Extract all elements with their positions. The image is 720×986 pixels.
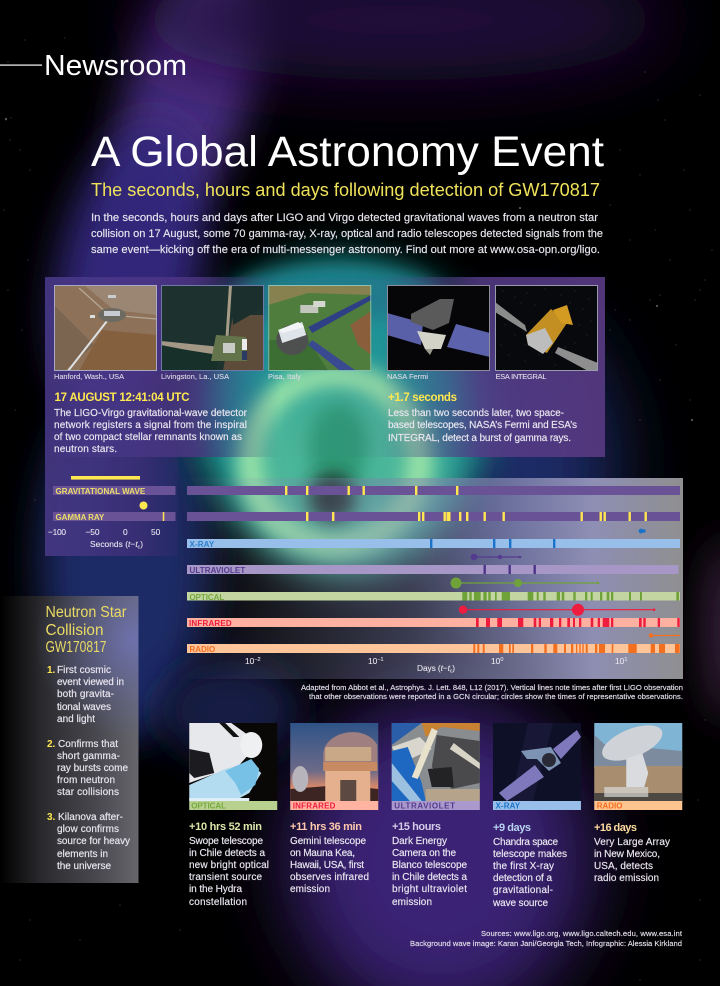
ultraviolet track: ULTRAVIOLET [190, 566, 246, 575]
description: new bright optical [189, 860, 269, 871]
intro text: same event—kicking off the era of multi-messenger astronomy. Find out more at www.osa-opn.org/ligo. [91, 244, 600, 256]
optical track: OPTICAL [190, 593, 224, 602]
description: transient source [189, 872, 262, 883]
description [189, 836, 269, 908]
chart source note: that other observations were reported in a GCN circular; circles show the times of representative observations. [309, 692, 683, 701]
bright stars [6, 119, 692, 716]
point 1: event viewed in [57, 677, 124, 688]
seconds axis: 50 [151, 527, 161, 537]
photo: Gemini telescope [290, 723, 378, 810]
seconds axis: −50 [86, 527, 100, 537]
card: infrared [290, 723, 378, 895]
days axis: ) [452, 663, 455, 673]
title: A Global Astronomy Event [91, 128, 604, 176]
days axis: 1 [624, 657, 627, 663]
seconds axis: −100 [48, 527, 66, 537]
event text: +1.7 seconds: INTEGRAL, detect a burst of gamma rays. [388, 433, 571, 444]
sidebar heading: Neutron Star [46, 604, 126, 621]
infrared track [187, 604, 680, 628]
days axis [245, 656, 627, 674]
photo: Dark Energy Camera [392, 723, 480, 810]
x-ray track [187, 529, 680, 549]
sidebar heading: GW170817 [46, 639, 106, 656]
description: Chandra space [493, 837, 558, 848]
description: observes infrared [290, 872, 369, 883]
days axis: −2 [254, 657, 261, 663]
description: telescope makes [493, 849, 567, 860]
card: optical [189, 723, 277, 908]
sources credit [410, 929, 683, 948]
point 2: Confirms that [58, 739, 118, 750]
point 2: 2. [47, 739, 56, 750]
photo: Very Large Array: RADIO [597, 801, 623, 810]
event text: +1.7 seconds: +1.7 seconds [388, 392, 457, 404]
seconds axis: ) [140, 539, 143, 549]
event text: 17 August: network registers a signal from the inspiral [54, 420, 247, 431]
point 3: source for heavy [57, 836, 130, 847]
photo: Dark Energy Camera: ULTRAVIOLET [394, 801, 455, 810]
event text: 17 August [54, 392, 248, 455]
panel: days chart [178, 478, 683, 679]
point 3: glow confirms [57, 824, 119, 835]
photo: ESA INTEGRAL [495, 285, 598, 371]
point 1: First cosmic [57, 665, 111, 676]
point 2: short gamma- [57, 751, 120, 762]
description: Gemini telescope [290, 836, 366, 847]
sidebar heading: Collision [46, 622, 104, 639]
days axis: 10 [245, 656, 254, 666]
gravitational wave track [187, 486, 680, 495]
card: x-ray [492, 723, 581, 909]
description: in Chile detects a [189, 848, 265, 859]
date: +10 hrs 52 min [189, 821, 262, 833]
description: wave source [492, 898, 548, 909]
event text: +1.7 seconds [388, 392, 577, 444]
card: ultraviolet [392, 723, 480, 908]
days axis: 0 [500, 657, 503, 663]
date: +15 hours [392, 821, 441, 833]
photo captions: Pisa, Italy [268, 372, 301, 381]
ultraviolet track [187, 554, 678, 575]
description: Dark Energy [392, 836, 447, 847]
point 2: ray bursts come [57, 763, 128, 774]
event text: +1.7 seconds: Less than two seconds later, two space- [388, 408, 564, 419]
x-ray track: X-RAY [190, 540, 215, 549]
point 1: and light [57, 714, 95, 725]
point 3: 3. [47, 812, 56, 823]
description [290, 836, 369, 895]
point 1: both gravita- [57, 689, 114, 700]
sources credit: Background wave image: Karan Jani/Georgia Tech, Infographic: Alessia Kirkland [410, 939, 682, 948]
description: in New Mexico, [594, 849, 660, 860]
seconds axis: c [138, 544, 141, 550]
days axis: c [450, 668, 453, 674]
chart source note [301, 683, 683, 701]
description: emission [290, 884, 330, 895]
intro text: In the seconds, hours and days after LIGO and Virgo detected gravitational waves from a neutron star [91, 212, 598, 224]
photo captions [54, 372, 546, 381]
gamma ray bar: GAMMA RAY [56, 513, 105, 522]
section label: Newsroom: Newsroom [44, 50, 187, 82]
photo: NASA Fermi [387, 285, 490, 371]
subtitle: The seconds, hours and days following detection of GW170817 [91, 180, 600, 200]
photo: Pisa [268, 285, 372, 371]
point 1 [47, 665, 124, 725]
radio track [187, 633, 680, 654]
photo: Chandra telescope: X-RAY [495, 801, 521, 810]
point 2: from neutron [57, 775, 115, 786]
card: radio [594, 718, 682, 884]
chart source note: Adapted from Abbot et al., Astrophys. J. Lett. 848, L12 (2017). Vertical lines note times after first LIGO observation [301, 683, 683, 692]
days axis: 10 [491, 656, 500, 666]
photo: Hanford [54, 285, 157, 371]
photo captions: Livingston, La., USA [161, 372, 229, 381]
panel: detection timeline top [45, 277, 605, 457]
description: constellation [189, 897, 247, 908]
photo captions: Hanford, Wash., USA [54, 372, 124, 381]
sources credit: Sources: www.ligo.org, www.ligo.caltech.edu, www.esa.int [481, 929, 683, 938]
description: the first X-ray [493, 861, 554, 872]
photo: Swope telescope [189, 723, 278, 810]
infrared track: INFRARED [189, 619, 232, 628]
photo captions: NASA Fermi [387, 372, 428, 381]
date: +11 hrs 36 min [290, 821, 362, 833]
description: in the Hydra [189, 884, 242, 895]
point 2: star collisions [57, 787, 119, 798]
days axis: 10 [615, 656, 624, 666]
description: Camera on the [392, 848, 456, 859]
event text: 17 August: neutron stars. [54, 444, 117, 455]
description: gravitational- [493, 885, 553, 896]
description: USA, detects [594, 861, 653, 872]
description [392, 836, 467, 908]
event text: 17 August: The LIGO-Virgo gravitational-wave detector [54, 408, 248, 419]
description: on Mauna Kea, [290, 848, 355, 859]
description: radio emission [594, 873, 659, 884]
date: +9 days [493, 822, 531, 834]
event text: +1.7 seconds: based telescopes, NASA’s Fermi and ESA’s [388, 420, 577, 431]
days axis: Days (t−t [417, 663, 450, 673]
sidebar heading [46, 604, 126, 656]
days axis: −1 [377, 657, 384, 663]
photo: Chandra telescope [493, 723, 581, 810]
photo: Swope telescope: OPTICAL [191, 801, 226, 810]
date: +16 days [594, 822, 637, 834]
seconds axis: Seconds (t−t [90, 539, 138, 549]
photo: Gemini telescope: INFRARED [293, 801, 336, 810]
intro text: collision on 17 August, some 70 gamma-ray, X-ray, optical and radio telescopes detected signals from the [91, 228, 603, 240]
description: in Chile detects a [392, 872, 467, 883]
optical track [187, 578, 680, 602]
panel: seconds chart [45, 457, 178, 556]
description: Blanco telescope [392, 860, 467, 871]
photo: Livingston [161, 285, 264, 371]
point 3: the universe [57, 861, 111, 872]
description: bright ultraviolet [392, 884, 467, 895]
event text: 17 August: 17 AUGUST 12:41:04 UTC [54, 392, 190, 404]
radio track: RADIO [190, 645, 216, 654]
point 3: elements in [57, 849, 108, 860]
photo captions: ESA INTEGRAL [496, 372, 546, 381]
days axis: 10 [368, 656, 377, 666]
point 3 [47, 812, 130, 872]
seconds axis: 0 [123, 527, 128, 537]
point 1: tional waves [57, 702, 111, 713]
description: Hawaii, USA, first [290, 860, 364, 871]
description [594, 837, 670, 884]
point 1: 1. [47, 665, 56, 676]
photo: Very Large Array [594, 723, 682, 810]
description: detection of a [493, 873, 552, 884]
description: Very Large Array [594, 837, 670, 848]
point 3: Kilanova after- [58, 812, 123, 823]
intro text [91, 212, 603, 256]
event text: 17 August: of two compact stellar remnants known as [54, 432, 242, 443]
panel: neutron star collision sidebar [0, 596, 138, 883]
description: emission [392, 897, 432, 908]
description: Swope telescope [189, 836, 263, 847]
gravitational wave bar: GRAVITATIONAL WAVE [56, 487, 146, 496]
gamma ray track [187, 512, 680, 521]
point 2 [47, 739, 128, 798]
seconds axis [48, 527, 161, 550]
description [492, 837, 567, 909]
